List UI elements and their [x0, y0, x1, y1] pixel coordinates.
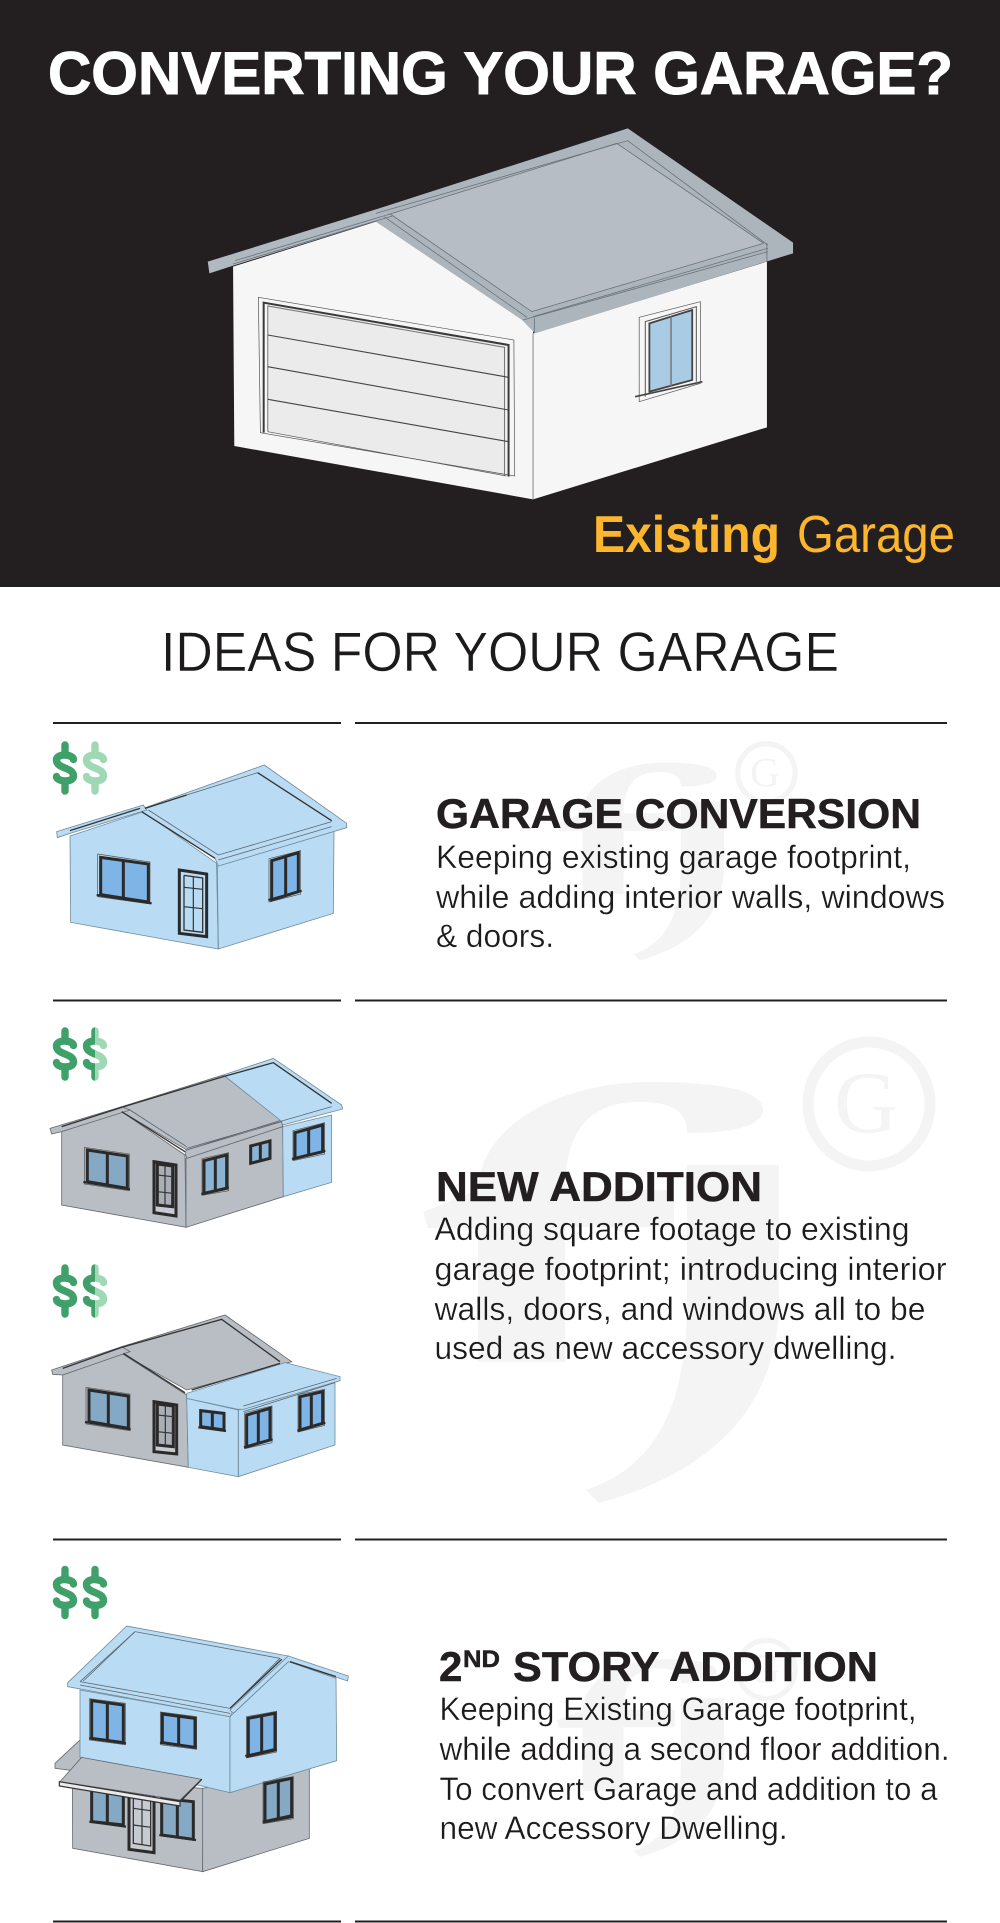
window [292, 1123, 325, 1161]
window [97, 854, 152, 904]
icon: cost dollars [56, 745, 104, 791]
divider rules [53, 723, 947, 1922]
window [160, 1712, 197, 1749]
text: second story addition: 2 [439, 1643, 462, 1690]
window [89, 1699, 126, 1745]
icon: cost dollars [56, 1570, 104, 1616]
text: new addition: used as new accessory dwelling. [434, 1330, 896, 1366]
window [201, 1153, 229, 1195]
window [268, 851, 302, 902]
illustration: existing garage [208, 128, 793, 499]
illustration: addition projecting forward [52, 1315, 340, 1477]
panel: new addition [50, 1031, 947, 1477]
panel: dark header [0, 0, 1000, 587]
door [129, 1792, 154, 1853]
garage door [258, 297, 515, 477]
text: new addition [434, 1163, 947, 1366]
window [85, 1387, 131, 1431]
window [244, 1406, 273, 1449]
panel: garage conversion [56, 745, 945, 954]
label: existing garage: Existing [593, 506, 780, 564]
illustration: addition extending end [50, 1058, 343, 1227]
title: CONVERTING YOUR GARAGE? [48, 40, 953, 107]
watermark: section one [557, 744, 795, 960]
awning [59, 1757, 202, 1806]
watermark: section two [423, 1042, 930, 1503]
window [159, 1798, 196, 1840]
watermark: section one: G [750, 749, 780, 795]
panel: second story addition [55, 1570, 949, 1872]
window [297, 1389, 325, 1432]
window [245, 1711, 277, 1758]
watermark: section two: G [834, 1055, 898, 1152]
text: garage conversion [435, 790, 945, 954]
heading: ideas: IDEAS FOR YOUR GARAGE [161, 620, 839, 683]
watermark: section three [557, 1640, 795, 1857]
window [89, 1787, 126, 1827]
text: garage conversion: while adding interior walls, windows [435, 879, 945, 915]
text: second story addition: STORY ADDITION [513, 1643, 878, 1690]
text: new addition: NEW ADDITION [436, 1163, 762, 1210]
window [263, 1777, 293, 1824]
text: second story addition [439, 1629, 950, 1846]
icon: cost dollars [56, 1031, 104, 1077]
illustration: converted garage [57, 765, 347, 949]
text: garage conversion: GARAGE CONVERSION [436, 790, 921, 837]
text: garage conversion: Keeping existing garage footprint, [436, 839, 911, 875]
text: new addition: Adding square footage to existing [434, 1211, 910, 1247]
garage window [635, 302, 702, 402]
text: garage conversion: & doors. [436, 918, 554, 954]
door [179, 870, 207, 937]
text: new addition: walls, doors, and windows all to be [434, 1291, 926, 1327]
text: new addition: garage footprint; introducing interior [434, 1251, 947, 1287]
window [83, 1147, 130, 1191]
window [251, 1141, 270, 1163]
watermark: section three: G [750, 1646, 780, 1692]
text: second story addition: while adding a second floor addition. [439, 1731, 950, 1767]
text: second story addition: To convert Garage and addition to a [440, 1771, 938, 1807]
label: existing garage: Garage [797, 506, 955, 564]
door [154, 1162, 176, 1216]
door [154, 1402, 177, 1454]
window [198, 1411, 226, 1431]
text: second story addition: new Accessory Dwelling. [440, 1810, 788, 1846]
icon: cost dollars [56, 1268, 104, 1314]
text: second story addition: ND [463, 1646, 500, 1673]
illustration: two storey house [55, 1626, 348, 1872]
text: second story addition: Keeping Existing Garage footprint, [440, 1691, 916, 1727]
